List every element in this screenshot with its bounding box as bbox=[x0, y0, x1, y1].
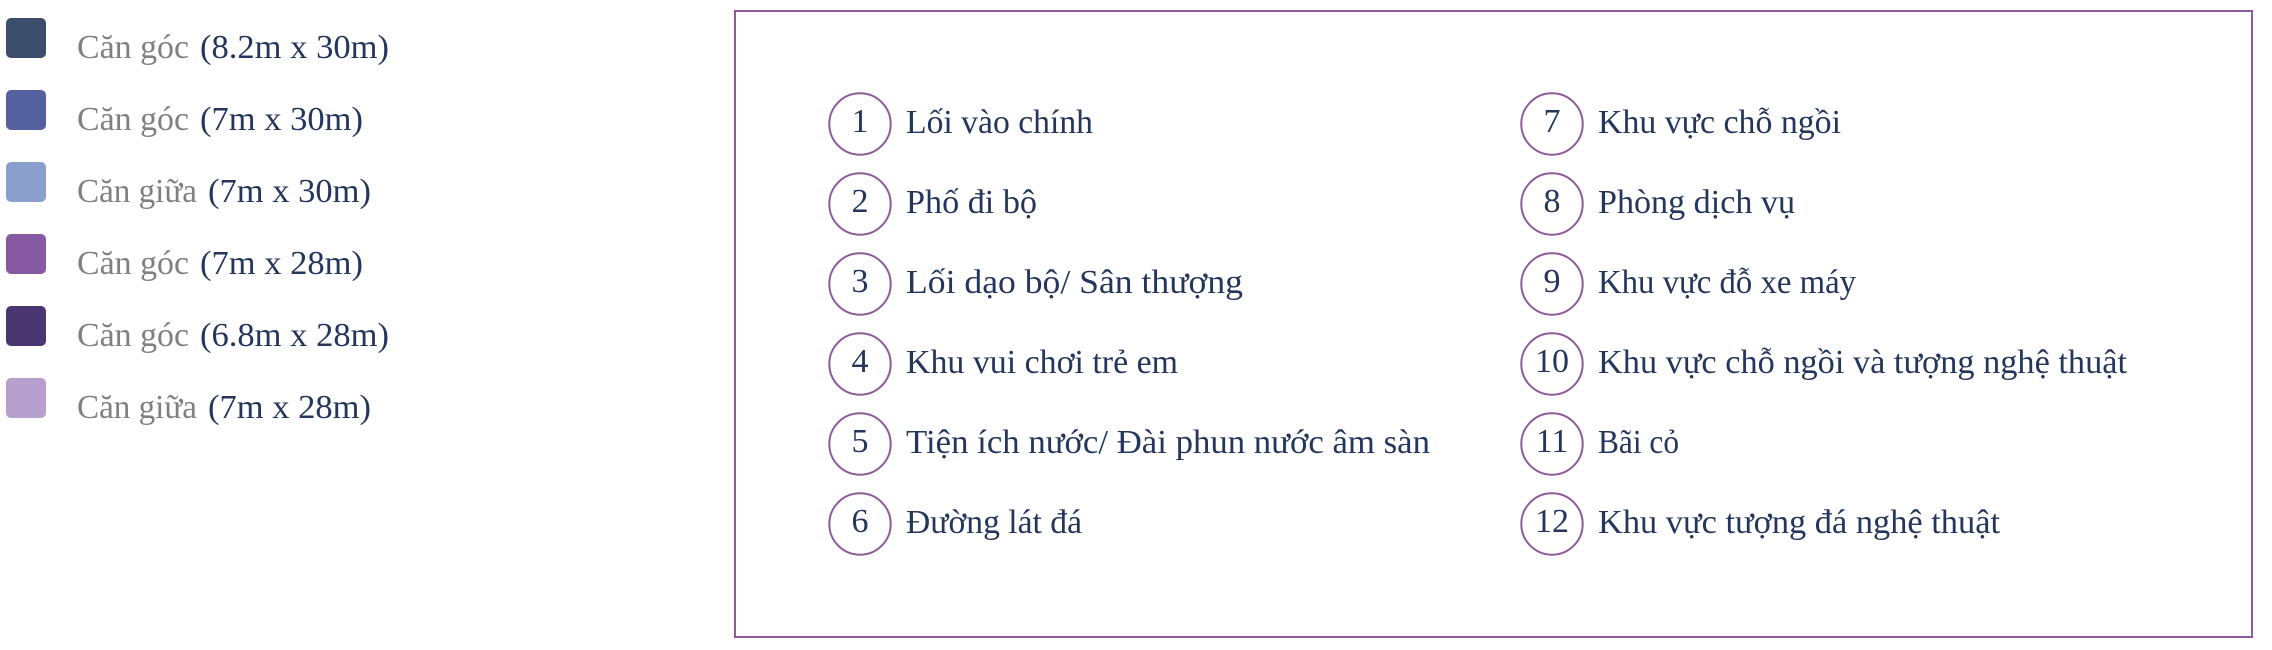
item 12: Khu vực tượng đá nghệ thuật bbox=[1598, 504, 2001, 541]
panel border bbox=[735, 11, 2252, 637]
item 12: 12 bbox=[1535, 503, 1569, 540]
item 8 bbox=[1521, 173, 1795, 235]
legend item: corner 7m x 30m: Căn góc bbox=[77, 101, 189, 138]
item 4 bbox=[829, 333, 1178, 395]
item 2: 2 bbox=[852, 183, 868, 220]
legend: unit types bbox=[6, 18, 389, 426]
item 6 bbox=[829, 493, 1082, 555]
item 10 bbox=[1521, 333, 2128, 395]
item 1 bbox=[829, 93, 1093, 155]
legend item: middle 7m x 30m: Căn giữa bbox=[77, 173, 197, 210]
legend item: middle 7m x 28m: Căn giữa bbox=[77, 389, 197, 426]
legend item: middle 7m x 28m: (7m x 28m) bbox=[208, 389, 371, 426]
legend item: middle 7m x 30m: (7m x 30m) bbox=[208, 173, 371, 210]
item 11: 11 bbox=[1536, 423, 1568, 460]
item 11: Bãi cỏ bbox=[1598, 424, 1679, 461]
legend item: corner 8.2m x 30m bbox=[6, 18, 389, 66]
legend item: middle 7m x 28m bbox=[6, 378, 371, 426]
legend item: corner 7m x 28m: Căn góc bbox=[77, 245, 189, 282]
legend item: middle 7m x 30m bbox=[6, 162, 371, 210]
item 9: 9 bbox=[1544, 263, 1560, 300]
item 4: 4 bbox=[852, 343, 868, 380]
item 4: Khu vui chơi trẻ em bbox=[906, 344, 1178, 381]
item 2 bbox=[829, 173, 1037, 235]
panel: numbered amenities bbox=[735, 11, 2252, 637]
legend item: corner 7m x 30m bbox=[6, 90, 363, 138]
item 9: Khu vực đỗ xe máy bbox=[1598, 264, 1856, 301]
legend item: corner 6.8m x 28m: Căn góc bbox=[77, 317, 189, 354]
item 5: 5 bbox=[852, 423, 868, 460]
item 3: 3 bbox=[852, 263, 868, 300]
legend item: corner 7m x 28m bbox=[6, 234, 363, 282]
item 3 bbox=[829, 253, 1243, 315]
item 10: Khu vực chỗ ngồi và tượng nghệ thuật bbox=[1598, 344, 2128, 381]
item 7: 7 bbox=[1544, 103, 1560, 140]
legend item: corner 8.2m x 30m: Căn góc bbox=[77, 29, 189, 66]
legend item: corner 6.8m x 28m: (6.8m x 28m) bbox=[200, 317, 389, 354]
item 8: Phòng dịch vụ bbox=[1598, 184, 1795, 221]
item 1: Lối vào chính bbox=[906, 104, 1093, 141]
item 9 bbox=[1521, 253, 1856, 315]
item 5 bbox=[829, 413, 1430, 475]
legend item: corner 7m x 30m: (7m x 30m) bbox=[200, 101, 363, 138]
item 6: 6 bbox=[852, 503, 868, 540]
item 12 bbox=[1521, 493, 2001, 555]
item 2: Phố đi bộ bbox=[906, 184, 1037, 221]
item 8: 8 bbox=[1544, 183, 1560, 220]
legend item: corner 6.8m x 28m bbox=[6, 306, 389, 354]
item 11 bbox=[1521, 413, 1679, 475]
legend item: corner 7m x 28m: (7m x 28m) bbox=[200, 245, 363, 282]
legend item: corner 8.2m x 30m: (8.2m x 30m) bbox=[200, 29, 389, 66]
item 7 bbox=[1521, 93, 1841, 155]
item 6: Đường lát đá bbox=[906, 504, 1082, 541]
item 1: 1 bbox=[852, 103, 868, 140]
item 3: Lối dạo bộ/ Sân thượng bbox=[906, 264, 1243, 301]
item 5: Tiện ích nước/ Đài phun nước âm sàn bbox=[906, 424, 1430, 461]
item 10: 10 bbox=[1535, 343, 1569, 380]
item 7: Khu vực chỗ ngồi bbox=[1598, 104, 1841, 141]
